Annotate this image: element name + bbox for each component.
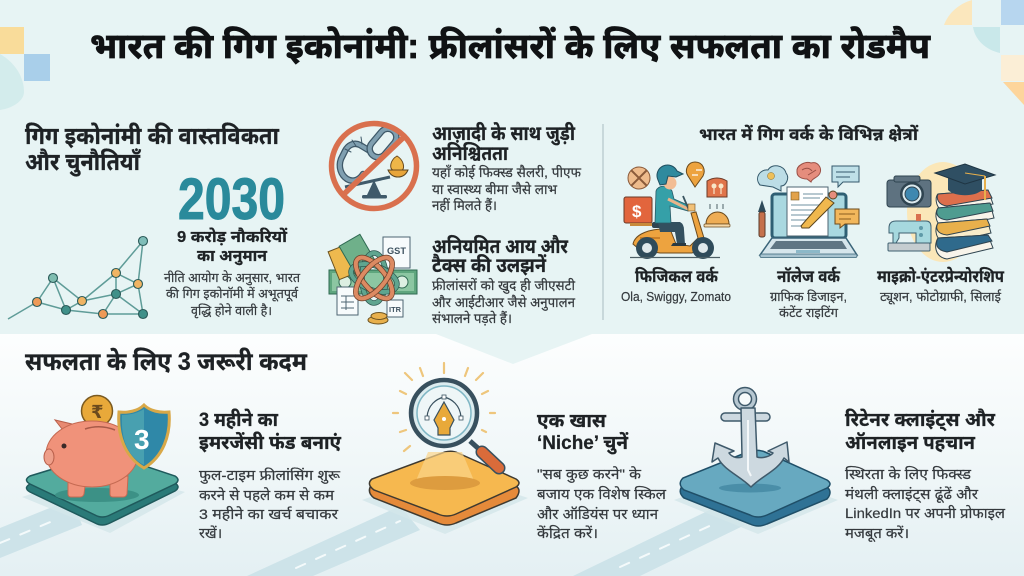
icon: delivery rider on scooter <box>624 162 730 259</box>
text: step 1: 3 महीने का खर्च बचाकर <box>199 505 338 522</box>
label: knowledge work: ग्राफिक डिजाइन, <box>770 289 847 304</box>
label: physical work: Ola, Swiggy, Zomato <box>621 289 731 304</box>
heading: reality <box>25 122 280 177</box>
label: physical work <box>621 266 731 304</box>
stat label: 9 करोड़ नौकरियों <box>177 227 288 246</box>
icon: delivery rider on scooter: $ <box>632 202 642 221</box>
icon: no sign with broken chain and scale <box>332 124 416 208</box>
text: step 2: केंद्रित करें। <box>537 525 598 541</box>
label: knowledge work: नॉलेज वर्क <box>777 266 841 286</box>
text: step 2: "सब कुछ करने" के <box>537 465 641 484</box>
label: micro-entrepreneurship: ट्यूशन, फोटोग्राफी, सिलाई <box>880 289 1002 305</box>
stat description: वृद्धि होने वाली है। <box>191 303 272 318</box>
text: uncertainty: या स्वास्थ्य बीमा जैसे लाभ <box>432 180 558 197</box>
step 2: choose a niche <box>369 363 667 541</box>
stat label: का अनुमान <box>197 248 268 266</box>
text: irregular income and taxes: टैक्स की उलझनें <box>432 253 547 277</box>
text: step 3: ऑनलाइन पहचान <box>845 432 975 454</box>
label: knowledge work <box>770 266 847 320</box>
step 3: retainer clients and online identity <box>680 390 1006 543</box>
icon: network growth chart <box>8 236 148 319</box>
text: step 1: 3 महीने का <box>199 408 278 431</box>
text: step 3: LinkedIn पर अपनी प्रोफाइल <box>845 505 1006 521</box>
text: step 1: इमरजेंसी फंड बनाएं <box>199 431 341 454</box>
text: uncertainty: आज़ादी के साथ जुड़ी <box>432 121 576 146</box>
text: step 2: और ऑडियंस पर ध्यान <box>537 506 658 522</box>
heading: 3 steps: सफलता के लिए 3 जरूरी कदम <box>25 347 308 376</box>
text: step 1: फुल-टाइम फ्रीलांसिंग शुरू <box>199 467 341 485</box>
text: step 3 <box>845 408 1006 543</box>
text: step 2 <box>537 411 667 541</box>
panel: gig work sectors <box>621 124 1004 320</box>
text: irregular income and taxes: अनियमित आय और <box>432 234 569 258</box>
icon: tangled knot with cash and tax documents <box>328 234 417 324</box>
text: uncertainty <box>432 121 582 213</box>
icon: tangled knot with cash and tax documents: GST <box>387 246 407 256</box>
icon: teal platform with piggy bank and shield: 3 <box>134 424 150 455</box>
text: step 1: रखें। <box>199 525 222 541</box>
title: भारत की गिग इकोनांमी: फ्रीलांसरों के लिए सफलता का रोडमैप <box>90 25 931 66</box>
text: irregular income and taxes: और आईटीआर जैसे अनुपालन <box>432 293 575 312</box>
label: micro-entrepreneurship <box>877 266 1004 305</box>
text: uncertainty: नहीं मिलते हैं। <box>432 196 497 213</box>
text: irregular income and taxes <box>432 234 575 326</box>
heading: sectors: भारत में गिग वर्क के विभिन्न क्षेत्रों <box>699 124 919 144</box>
heading: reality: गिग इकोनांमी की वास्तविकता <box>25 122 280 150</box>
text: step 3: मजबूत करें। <box>845 525 909 543</box>
icon: laptop with document and pencil <box>758 162 859 258</box>
text: step 3: मंथली क्लाइंट्स ढूंढें और <box>845 486 978 504</box>
icon: tangled knot with cash and tax documents: ITR <box>389 307 401 314</box>
panel: uncertainty and taxes <box>328 121 582 326</box>
icon: teal platform with piggy bank and shield: ₹ <box>91 402 104 423</box>
text: uncertainty: यहाँ कोई फिक्स्ड सैलरी, पीएफ <box>432 163 582 180</box>
stat description <box>164 270 301 318</box>
text: step 3: स्थिरता के लिए फिक्स्ड <box>845 465 972 482</box>
label: knowledge work: कंटेंट राइटिंग <box>779 305 839 320</box>
label: micro-entrepreneurship: माइक्रो-एंटरप्रेन्योरशिप <box>877 266 1004 286</box>
icon: blue platform with anchor <box>680 390 830 526</box>
text: uncertainty: अनिश्चितता <box>432 141 509 165</box>
heading: reality: और चुनौतियाँ <box>25 148 142 177</box>
icon: camera, sewing machine and books <box>887 162 995 262</box>
text: step 3: रिटेनर क्लाइंट्स और <box>845 408 996 431</box>
stat description: की गिग इकोनॉमी में अभूतपूर्व <box>166 286 299 302</box>
stat description: नीति आयोग के अनुसार, भारत <box>164 270 301 286</box>
text: step 2: ‘Niche’ चुनें <box>537 431 629 455</box>
label: physical work: फिजिकल वर्क <box>635 266 719 286</box>
panel: reality and challenges <box>8 122 301 319</box>
text: step 1: करने से पहले कम से कम <box>199 486 335 503</box>
text: irregular income and taxes: फ्रीलांसरों को खुद ही जीएसटी <box>432 277 575 295</box>
text: step 1 <box>199 408 341 541</box>
big number 2030: 2030 <box>178 167 285 232</box>
text: irregular income and taxes: संभालने पड़ते हैं। <box>432 309 512 326</box>
icon: orange platform with magnifier and pen nib <box>369 363 519 525</box>
stat label <box>177 227 288 266</box>
icon: teal platform with piggy bank and shield <box>26 396 178 525</box>
step 1: emergency fund <box>26 396 341 541</box>
text: step 2: एक खास <box>537 411 607 432</box>
text: step 2: बजाय एक विशेष स्किल <box>537 485 667 502</box>
